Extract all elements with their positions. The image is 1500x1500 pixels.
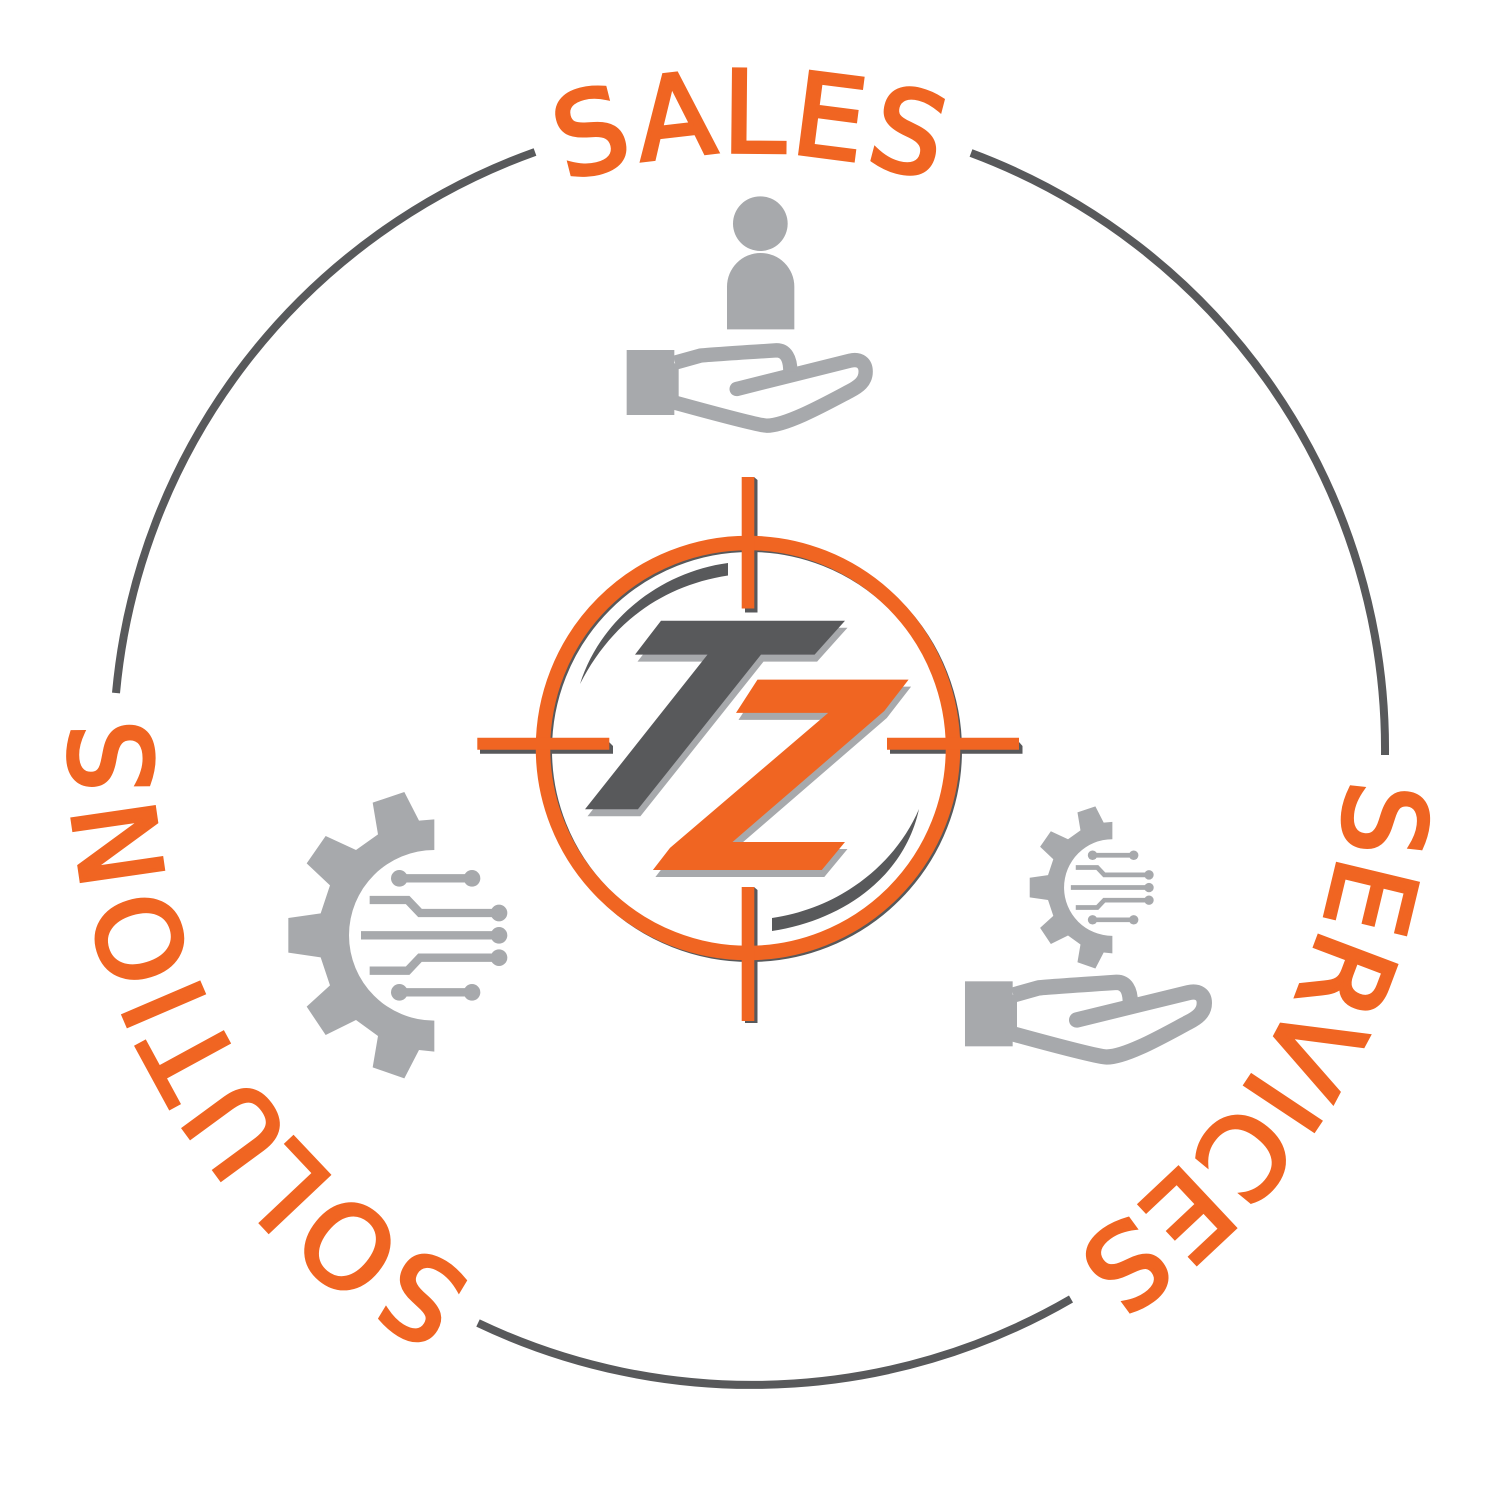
icon: person on hand: [627, 196, 866, 426]
swoosh: lower right: [772, 809, 919, 931]
icon: gear with circuit: [288, 792, 507, 1078]
monogram letter Z: [653, 680, 911, 877]
crosshair tick shadows: [480, 477, 1022, 1023]
heading: solutions: SOLUTIONS: [66, 724, 468, 1342]
crosshair ring: [543, 543, 955, 955]
swoosh: upper left: [580, 563, 728, 684]
icon: gear on hand: [965, 806, 1204, 1057]
crosshair ticks: [477, 477, 1019, 1021]
heading: services: SERVICES: [1086, 785, 1430, 1314]
outer ring arcs: [116, 152, 1385, 1385]
logo: crosshair with TZ monogram: [477, 477, 1022, 1023]
heading: sales: SALES: [555, 67, 945, 177]
monogram letter T: [585, 621, 848, 816]
